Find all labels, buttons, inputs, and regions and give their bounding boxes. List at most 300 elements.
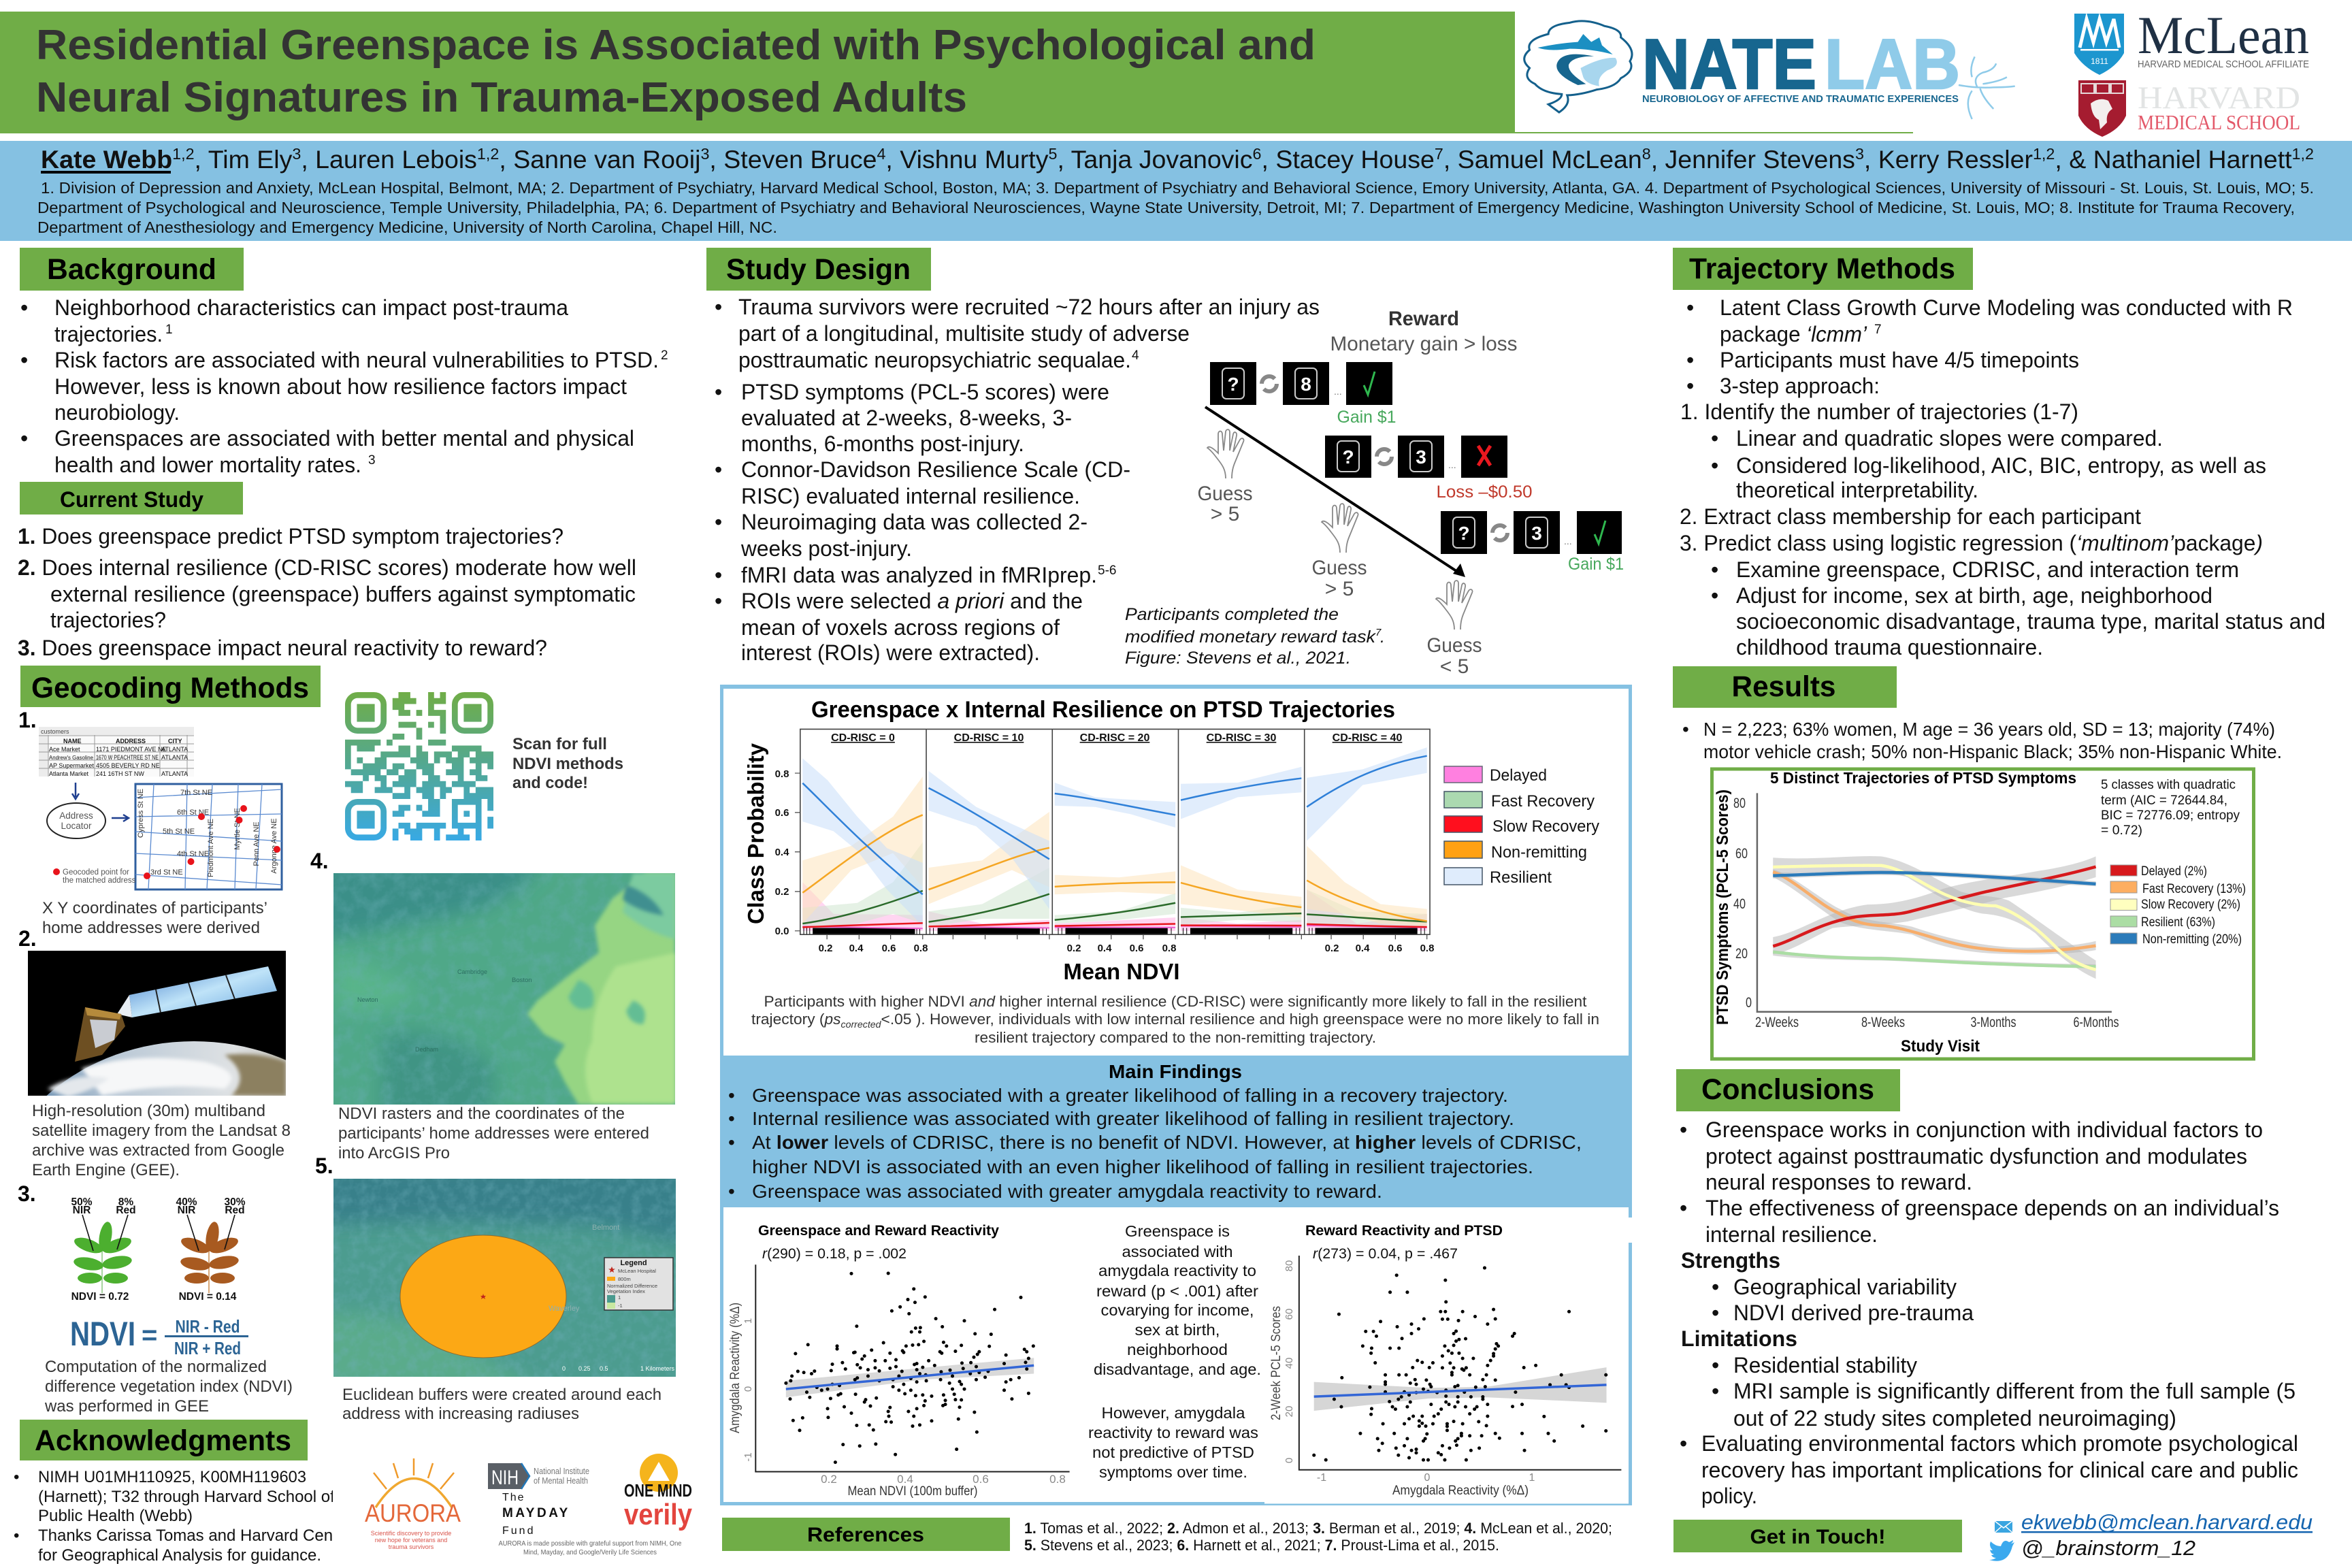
- y axis: Class Probability: [743, 742, 768, 924]
- references: 1. Tomas et al., 2022; 2. Admon et al., 2013; 3. Berman et al., 2019; 4. McLean et al., 2020;: [1024, 1520, 1612, 1537]
- panel: trajectory methods: Participants must have 4/5 timepoints: [1720, 348, 2079, 372]
- scatter: reward reactivity and PTSD: 2-Week PCL-5 Scores: [1269, 1306, 1284, 1420]
- table of addresses: customers: [41, 728, 69, 735]
- street map: [135, 784, 282, 889]
- panel: study design: posttraumatic neuropsychiatric sequalae.: [738, 348, 1131, 372]
- legend: [1444, 766, 1599, 887]
- panel: current study: 3. Does greenspace impact neural reactivity to reward?: [18, 636, 547, 660]
- center statement: reward (p < .001) after: [1096, 1282, 1258, 1300]
- panel: acknowledgments: (Harnett); T32 through Harvard School of: [38, 1488, 335, 1506]
- step 4: NDVI raster: NDVI rasters and the coordinates of the: [338, 1105, 625, 1123]
- street map: Piedmont Ave NE: [207, 819, 215, 877]
- scatter: greenspace and reward reactivity: 0.8: [1049, 1473, 1066, 1486]
- legend: Delayed: [1490, 766, 1547, 785]
- table of addresses: Ace Market: [49, 746, 80, 753]
- panel: acknowledgments: for Geographical Analysis for guidance.: [38, 1546, 321, 1565]
- reward task figure: > 5: [1325, 578, 1354, 600]
- step 3: NDVI computation: Computation of the normalized: [45, 1358, 267, 1376]
- panel: background: neurobiology.: [54, 400, 180, 425]
- chart caption: trajectory (ps: [751, 1011, 840, 1028]
- author band: [0, 141, 2352, 241]
- panel: study design: •: [715, 295, 722, 319]
- panel: study design: 5-6: [1098, 564, 1116, 578]
- panel: trajectory methods: •: [1711, 426, 1718, 451]
- chart caption: corrected: [841, 1019, 882, 1030]
- trial 3: 3: [1531, 523, 1542, 544]
- logo: Aurora: AURORA: [365, 1499, 461, 1527]
- logo: Harvard Medical School: MEDICAL SCHOOL: [2138, 110, 2300, 134]
- panel: current study: Current Study: [60, 487, 203, 512]
- icon: brown leaf: Red: [225, 1205, 245, 1216]
- table of addresses: Atlanta Market: [49, 770, 89, 777]
- panel: geocoding methods heading: Geocoding Methods: [31, 672, 309, 704]
- panel: study design: evaluated at 2-weeks, 8-weeks, 3-: [741, 406, 1072, 430]
- step 2: satellite: High-resolution (30m) multiband: [32, 1102, 265, 1120]
- panel: study design: fMRI data was analyzed in fMRIprep.: [741, 563, 1097, 587]
- model fit note: BIC = 72776.09; entropy: [2101, 808, 2240, 823]
- axis labels: 40: [1733, 896, 1746, 912]
- axis labels: 20: [1735, 946, 1748, 962]
- panel: conclusions: Residential stability: [1733, 1353, 1917, 1377]
- street map: 7th St NE: [180, 789, 212, 797]
- icon: brown leaf: NIR: [178, 1205, 195, 1216]
- panel: background: •: [20, 426, 28, 451]
- x axis: 0.6: [1388, 943, 1402, 954]
- panel: results: N = 2,223; 63% women, M age = 36 years old, SD = 13; majority (74%): [1703, 719, 2275, 740]
- y axis: [743, 742, 789, 937]
- logo: Aurora: new hope for veterans and: [375, 1537, 447, 1544]
- panel: trajectory methods: Examine greenspace, CDRISC, and interaction term: [1736, 557, 2239, 582]
- reward task figure: Guess: [1426, 634, 1482, 657]
- panel: acknowledgments: Public Health (Webb): [38, 1507, 193, 1525]
- main findings: •: [728, 1181, 735, 1202]
- NDVI raster map: Dedham: [415, 1046, 438, 1053]
- reward task figure: > 5: [1211, 503, 1239, 525]
- panel: study design: weeks post-injury.: [740, 536, 912, 561]
- panel: trajectory methods: •: [1711, 557, 1718, 582]
- affiliations: [37, 179, 2314, 236]
- authors: Kate Webb: [41, 146, 172, 174]
- main findings: Main Findings: [1109, 1061, 1242, 1082]
- scatter: reward reactivity and PTSD: -1: [1317, 1472, 1326, 1484]
- axis labels: 6-Months: [2073, 1015, 2119, 1030]
- step 2: satellite: Earth Engine (GEE).: [32, 1161, 180, 1179]
- panel: background: 3: [368, 453, 376, 468]
- street map: 6th St NE: [177, 808, 209, 817]
- NDVI formula: NIR + Red: [174, 1338, 241, 1358]
- panel: conclusions: Evaluating environmental factors which promote psychological: [1701, 1431, 2298, 1456]
- title banner: [0, 12, 1913, 133]
- panel: conclusions: Conclusions: [1701, 1073, 1874, 1106]
- y axis: 0.8: [775, 768, 789, 780]
- NDVI formula: =: [142, 1320, 157, 1350]
- panel: trajectory methods: •: [1711, 453, 1718, 478]
- address locator node: Locator: [61, 821, 92, 831]
- chart: greenspace x internal resilience: Greenspace x Internal Resilience on PTSD Trajectories: [811, 697, 1395, 723]
- panel: trajectory methods: Considered log-likelihood, AIC, BIC, entropy, as well as: [1736, 453, 2266, 478]
- scatter: reward reactivity and PTSD: 0: [1424, 1472, 1431, 1484]
- panel: background: trajectories.: [54, 322, 163, 346]
- figure caption: [1125, 605, 1385, 668]
- map legend: Legend: [620, 1259, 647, 1267]
- reward task figure: Guess: [1198, 483, 1252, 505]
- panel: background: However, less is known about how resilience factors impact: [54, 374, 627, 399]
- panel: study design: ROIs were selected a priori and the: [741, 589, 1083, 613]
- scatter: greenspace and reward reactivity: 0.6: [973, 1473, 989, 1486]
- main findings: Greenspace was associated with greater amygdala reactivity to reward.: [752, 1181, 1382, 1202]
- center statement: associated with: [1122, 1243, 1233, 1260]
- axis labels: 2-Weeks: [1755, 1015, 1799, 1030]
- logo: NIH and Mayday: MAYDAY: [502, 1506, 570, 1520]
- authors: 8: [1642, 145, 1651, 163]
- panel: conclusions: NDVI derived pre-trauma: [1733, 1301, 1974, 1325]
- figure caption: Participants completed the: [1125, 605, 1339, 624]
- panel: background: health and lower mortality rates.: [54, 453, 361, 477]
- authors: 3: [292, 145, 301, 163]
- street map: Cypress St NE: [137, 789, 145, 838]
- QR caption: Scan for full: [512, 735, 607, 753]
- x axis: [819, 943, 1434, 984]
- panel: trajectory methods: 7: [1874, 323, 1882, 337]
- title banner: Residential Greenspace is Associated with Psychological and: [36, 22, 1316, 69]
- panel: trajectory methods: Adjust for income, sex at birth, age, neighborhood: [1736, 583, 2212, 608]
- step 1: geocoding illustration: [18, 708, 282, 937]
- title banner: Neural Signatures in Trauma-Exposed Adults: [36, 74, 967, 121]
- trial 1: ?: [1227, 374, 1239, 395]
- logo: NATE Lab: LAB: [1825, 25, 1960, 104]
- table of addresses: AP Supermarket: [49, 762, 94, 769]
- main findings: Greenspace was associated with a greater likelihood of falling in a recovery trajectory.: [752, 1085, 1508, 1106]
- street map: 4th St NE: [177, 850, 209, 858]
- panel: study design: •: [715, 510, 722, 534]
- panel: background: Greenspaces are associated with better mental and physical: [54, 426, 634, 451]
- get in touch heading: [1673, 1520, 1962, 1552]
- trial 3: ...: [1564, 536, 1572, 546]
- affiliations: Department of Psychological and Neuroscience, Temple University, Philadelphia, PA; 6. Department of Psychiatry and Behavioral Neurosciences, Wayne State University, Detroit, MI; 7. Department of Emergency Medicine, Washington University School of Medicine, St. Louis, MO; 8. Institute for Trauma Recovery,: [37, 199, 2295, 216]
- panel: results: •: [1682, 719, 1689, 740]
- logo: McLean: McLean: [2138, 5, 2309, 65]
- x axis: 0.6: [882, 943, 896, 954]
- icon: brown leaf: [176, 1196, 246, 1303]
- panel: background: 1: [165, 323, 173, 337]
- authors: , Steven Bruce: [709, 146, 877, 174]
- scatter: reward reactivity and PTSD: Amygdala Reactivity (%Δ): [1392, 1484, 1529, 1498]
- affiliations: Department of Anesthesiology and Emergency Medicine, University of North Carolina, Chapel Hill, NC.: [37, 218, 777, 236]
- address locator node: [47, 803, 105, 838]
- authors: 7: [1435, 145, 1443, 163]
- step 1: geocoding illustration: Geocoded point for: [63, 868, 129, 877]
- panel: background: Risk factors are associated with neural vulnerabilities to PTSD.: [54, 348, 659, 372]
- center statement: amygdala reactivity to: [1098, 1262, 1256, 1279]
- step 4: NDVI raster: into ArcGIS Pro: [338, 1144, 450, 1162]
- references: 5. Stevens et al., 2023; 6. Harnett et al., 2021; 7. Proust-Lima et al., 2015.: [1024, 1537, 1499, 1554]
- panel: acknowledgments: NIMH U01MH110925, K00MH119603: [38, 1468, 306, 1486]
- step 4: NDVI raster: [310, 849, 675, 1162]
- chart caption: resilient trajectory compared to the non-remitting trajectory.: [975, 1029, 1376, 1046]
- axis labels: 60: [1735, 846, 1748, 862]
- step 1: geocoding illustration: home addresses were derived: [42, 919, 260, 937]
- panel: trajectory methods: socioeconomic disadvantage, trauma type, marital status and: [1736, 609, 2325, 634]
- trajectory legend: Resilient (63%): [2141, 915, 2215, 930]
- logo: One Mind and Verily: [624, 1454, 692, 1531]
- icon: brown leaf: NDVI = 0.14: [179, 1291, 237, 1303]
- buffer map: Belmont: [592, 1224, 619, 1232]
- axis labels: 3-Months: [1971, 1015, 2016, 1030]
- trajectory legend: Non-remitting (20%): [2142, 932, 2242, 947]
- panel: study design: Connor-Davidson Resilience Scale (CD-: [741, 457, 1130, 482]
- axis labels: 8-Weeks: [1861, 1015, 1905, 1030]
- panel: trajectory methods: 3. Predict class using logistic regression (‘multinom’package): [1680, 531, 2263, 555]
- panel: conclusions: MRI sample is significantly different from the full sample (5: [1733, 1379, 2296, 1403]
- panel: study design: •: [715, 563, 722, 587]
- panel: conclusions: internal resilience.: [1705, 1222, 1878, 1247]
- panel: center results frame: [720, 685, 1633, 1505]
- panel: conclusions: policy.: [1701, 1484, 1757, 1508]
- panel: study design: [706, 248, 1320, 665]
- legend: Resilient: [1490, 868, 1552, 887]
- table of addresses: CITY: [168, 738, 182, 745]
- buffer map: Waverley: [549, 1305, 580, 1313]
- logo: NIH and Mayday: Fund: [502, 1525, 535, 1537]
- main findings: Internal resilience was associated with greater likelihood of falling in resilient trajectory.: [752, 1108, 1514, 1129]
- center statement: Greenspace is: [1125, 1222, 1230, 1240]
- logo: One Mind and Verily: ONE MIND: [624, 1480, 692, 1501]
- panel: study design: •: [715, 380, 722, 404]
- step 2: satellite: archive was extracted from Google: [32, 1141, 284, 1160]
- model fit note: [2101, 778, 2240, 838]
- table of addresses: [39, 727, 194, 777]
- panel: background: •: [20, 348, 28, 372]
- scatter: greenspace and reward reactivity: Greenspace and Reward Reactivity: [758, 1223, 999, 1239]
- NDVI raster map: Newton: [357, 996, 378, 1003]
- contact details: [1989, 1510, 2313, 1561]
- step 5: Euclidean buffer: 5.: [315, 1154, 333, 1178]
- table of addresses: NAME: [63, 738, 82, 745]
- legend: Fast Recovery: [1491, 792, 1595, 811]
- scatter: reward reactivity and PTSD: r(273) = 0.04, p = .467: [1313, 1246, 1458, 1262]
- main findings: •: [728, 1085, 735, 1106]
- logo: NIH and Mayday: NIH: [491, 1467, 519, 1489]
- references: References: [807, 1524, 924, 1546]
- panel: study design: part of a longitudinal, multisite study of adverse: [738, 321, 1190, 346]
- figure caption: modified monetary reward task: [1125, 627, 1377, 647]
- table of addresses: Andrew's Gasoline: [49, 755, 94, 761]
- trajectory legend: [2110, 864, 2246, 947]
- x axis: 0.8: [914, 943, 928, 954]
- authors: 1,2: [477, 145, 499, 163]
- panel: trajectory methods: 2. Extract class membership for each participant: [1680, 504, 2141, 529]
- step 1: geocoding illustration: the matched address: [63, 877, 136, 885]
- chart: PTSD trajectories: [1712, 769, 2254, 1059]
- table of addresses: ADDRESS: [116, 738, 146, 745]
- NDVI formula: NDVI: [70, 1315, 135, 1353]
- authors: , Stacey House: [1262, 146, 1435, 174]
- chart caption: [751, 993, 1599, 1046]
- icon: green leaf: [71, 1196, 136, 1303]
- logo: Aurora: [365, 1458, 461, 1550]
- panel: trajectory methods: 3-step approach:: [1720, 374, 1880, 398]
- authors: , Jennifer Stevens: [1651, 146, 1855, 174]
- table of addresses: 1171 PIEDMONT AVE NE: [96, 746, 167, 753]
- panel: acknowledgments: Thanks Carissa Tomas and Harvard Center: [38, 1526, 352, 1545]
- panel: trajectory methods: theoretical interpretability.: [1736, 478, 1978, 502]
- references: [722, 1518, 1612, 1554]
- table of addresses: 1670 W PEACHTREE ST NE: [96, 754, 159, 761]
- main findings: [728, 1061, 1582, 1202]
- legend: Slow Recovery: [1492, 817, 1599, 836]
- panel: conclusions: Geographical variability: [1733, 1275, 1957, 1299]
- icon: brown leaf: 40%: [176, 1196, 197, 1208]
- panel: current study: external resilience (greenspace) buffers against symptomatic: [50, 582, 636, 606]
- reward task figure: Guess: [1312, 557, 1367, 579]
- logo: NIH and Mayday: Mind, Mayday, and Google/Verily Life Sciences: [523, 1548, 657, 1556]
- chart caption: Participants with higher NDVI and higher internal resilience (CD-RISC) were significantly more likely to fall in the resilient: [764, 993, 1587, 1010]
- panel: results: Results: [1731, 670, 1836, 703]
- step 3: NDVI computation: [18, 1181, 293, 1416]
- affiliations: 1. Division of Depression and Anxiety, McLean Hospital, Belmont, MA; 2. Department of Psychiatry, Harvard Medical School, Boston, MA; 3. Department of Psychiatry and Behavioral Science, Emory University, Atlanta, GA. 4. Department of Psychological Sciences, University of Missouri - St. Louis, St. Louis, MO; 5.: [41, 179, 2314, 197]
- axis labels: 0: [1746, 995, 1752, 1011]
- scatter: reward reactivity and PTSD: 40: [1284, 1358, 1295, 1369]
- axis labels: 80: [1733, 796, 1746, 811]
- QR caption: NDVI methods: [512, 755, 623, 773]
- panel: acknowledgments: Acknowledgments: [35, 1424, 291, 1457]
- scatter: greenspace and reward reactivity: Mean NDVI (100m buffer): [848, 1484, 977, 1499]
- logo: Harvard Medical School: HARVARD: [2138, 80, 2300, 116]
- step 5: Euclidean buffer: address with increasing radiuses: [342, 1405, 579, 1423]
- y axis: 0.6: [775, 807, 789, 819]
- main findings: At lower levels of CDRISC, there is no benefit of NDVI. However, at higher levels of CDRISC,: [752, 1132, 1582, 1153]
- scatter: greenspace and reward reactivity: -1: [742, 1452, 754, 1462]
- x axis: 0.4: [1098, 943, 1112, 954]
- scatter: greenspace and reward reactivity: 1: [742, 1318, 754, 1324]
- panel: acknowledgments: [14, 1420, 352, 1565]
- street map: 3rd St NE: [150, 868, 183, 877]
- map legend: Normalized Difference: [607, 1283, 657, 1289]
- logo: NATE Lab: NATE: [1642, 25, 1816, 104]
- buffer map: 0.5: [600, 1365, 608, 1372]
- x axis: 0.2: [1325, 943, 1339, 954]
- panel: conclusions: •: [1680, 1196, 1687, 1220]
- icon: green leaf: NDVI = 0.72: [71, 1291, 129, 1303]
- panel: study design: months, 6-months post-injury.: [741, 431, 1024, 456]
- scatter: greenspace and reward reactivity: 0.2: [821, 1473, 837, 1486]
- trajectory legend: Slow Recovery (2%): [2141, 898, 2240, 912]
- main findings: •: [728, 1132, 735, 1153]
- panel: current study: [18, 482, 636, 660]
- strip titles: [831, 732, 1402, 744]
- figure caption: .: [1380, 627, 1385, 647]
- panel: trajectory methods: [1673, 248, 2325, 659]
- chart: PTSD trajectories: 5 Distinct Trajectories of PTSD Symptoms: [1770, 769, 2076, 787]
- authors: , Vishnu Murty: [885, 146, 1049, 174]
- authors: 5: [1049, 145, 1057, 163]
- NDVI formula: NIR - Red: [176, 1316, 240, 1337]
- panel: conclusions: Limitations: [1681, 1326, 1797, 1351]
- QR caption: [512, 735, 623, 792]
- scatter: reward reactivity and PTSD: 80: [1284, 1260, 1295, 1271]
- map legend: [604, 1258, 673, 1310]
- panel: acknowledgments: •: [14, 1468, 19, 1486]
- icon: green leaf: 8%: [118, 1196, 133, 1208]
- trial 2: Loss –$0.50: [1436, 483, 1533, 502]
- panel: conclusions: The effectiveness of greenspace depends on an individual’s: [1705, 1196, 2279, 1220]
- panel: conclusions: •: [1712, 1301, 1719, 1325]
- panel frames: [800, 729, 1430, 934]
- table of addresses: ATLANTA: [161, 754, 188, 761]
- center statement: neighborhood: [1127, 1341, 1228, 1358]
- table of addresses: ATLANTA: [161, 770, 188, 777]
- icon: brown leaf: 30%: [224, 1196, 246, 1208]
- x axis: 0.8: [1162, 943, 1176, 954]
- scatter: greenspace and reward reactivity: [728, 1223, 1070, 1499]
- step 3: NDVI computation: was performed in GEE: [44, 1397, 209, 1416]
- step 5: Euclidean buffer: Euclidean buffers were created around each: [342, 1386, 662, 1404]
- x axis: 0.8: [1420, 943, 1434, 954]
- panel: study design: interest (ROIs) were extracted).: [741, 640, 1040, 665]
- map legend: Vegetation Index: [607, 1288, 645, 1294]
- x axis: 0.2: [819, 943, 832, 954]
- logo: McLean: HARVARD MEDICAL SCHOOL AFFILIATE: [2138, 59, 2309, 70]
- trial 2: ...: [1448, 459, 1456, 470]
- authors: , Tim Ely: [195, 146, 293, 174]
- step 2: satellite: 2.: [18, 926, 37, 951]
- step 2: satellite: satellite imagery from the Landsat 8: [32, 1122, 291, 1140]
- scatter: reward reactivity and PTSD: 0: [1284, 1458, 1295, 1463]
- reward task figure: Monetary gain > loss: [1330, 333, 1518, 355]
- step 2: satellite: [19, 930, 290, 1179]
- authors: 3: [1855, 145, 1864, 163]
- NDVI raster map: Cambridge: [457, 968, 487, 975]
- trial 2: ?: [1342, 446, 1354, 468]
- logo: NIH and Mayday: of Mental Health: [534, 1475, 588, 1486]
- icon: green leaf: Red: [116, 1205, 136, 1216]
- panel: conclusions: •: [1680, 1117, 1687, 1142]
- logo: NIH and Mayday: The: [502, 1492, 525, 1503]
- logo: Harvard Medical School: [2078, 80, 2300, 137]
- panel: background: •: [20, 295, 28, 320]
- center statement: symptoms over time.: [1099, 1463, 1247, 1481]
- logo: Aurora: trauma survivors: [389, 1544, 434, 1550]
- trial 2: 3: [1416, 446, 1426, 468]
- center statement: not predictive of PTSD: [1092, 1443, 1254, 1461]
- panel: trajectory methods: •: [1686, 374, 1694, 398]
- trajectory legend: Fast Recovery (13%): [2142, 882, 2246, 896]
- panel: results: motor vehicle crash; 50% non-Hispanic Black; 35% non-Hispanic White.: [1703, 741, 2282, 762]
- center statement: However, amygdala: [1101, 1404, 1245, 1422]
- panel: background: Background: [47, 253, 216, 286]
- main findings: •: [728, 1108, 735, 1129]
- panel: acknowledgments: •: [14, 1526, 19, 1545]
- panel: study design: Neuroimaging data was collected 2-: [741, 510, 1088, 534]
- authors: , Samuel McLean: [1443, 146, 1642, 174]
- contact details: ekwebb@mclean.harvard.edu: [2021, 1510, 2313, 1534]
- panel: conclusions: out of 22 study sites completed neuroimaging): [1733, 1406, 2176, 1431]
- panel: study design: Study Design: [726, 253, 911, 286]
- step 3: NDVI computation: difference vegetation index (NDVI): [45, 1377, 293, 1396]
- panel: current study: 2. Does internal resilience (CD-RISC scores) moderate how well: [18, 555, 636, 580]
- panel: conclusions: protect against posttraumatic dysfunction and modulates: [1705, 1144, 2247, 1169]
- authors: 6: [1253, 145, 1262, 163]
- map legend: McLean Hospital: [618, 1268, 656, 1274]
- y axis: 0.4: [775, 847, 789, 858]
- panel: conclusions: [1676, 1069, 2298, 1508]
- panel: trajectory methods: •: [1686, 348, 1694, 372]
- center statement: reactivity to reward was: [1088, 1424, 1258, 1441]
- panel: study design: RISC) evaluated internal resilience.: [741, 484, 1080, 508]
- NDVI formula: [70, 1315, 248, 1358]
- strip titles: CD-RISC = 30: [1207, 732, 1276, 744]
- strip titles: CD-RISC = 10: [954, 732, 1024, 744]
